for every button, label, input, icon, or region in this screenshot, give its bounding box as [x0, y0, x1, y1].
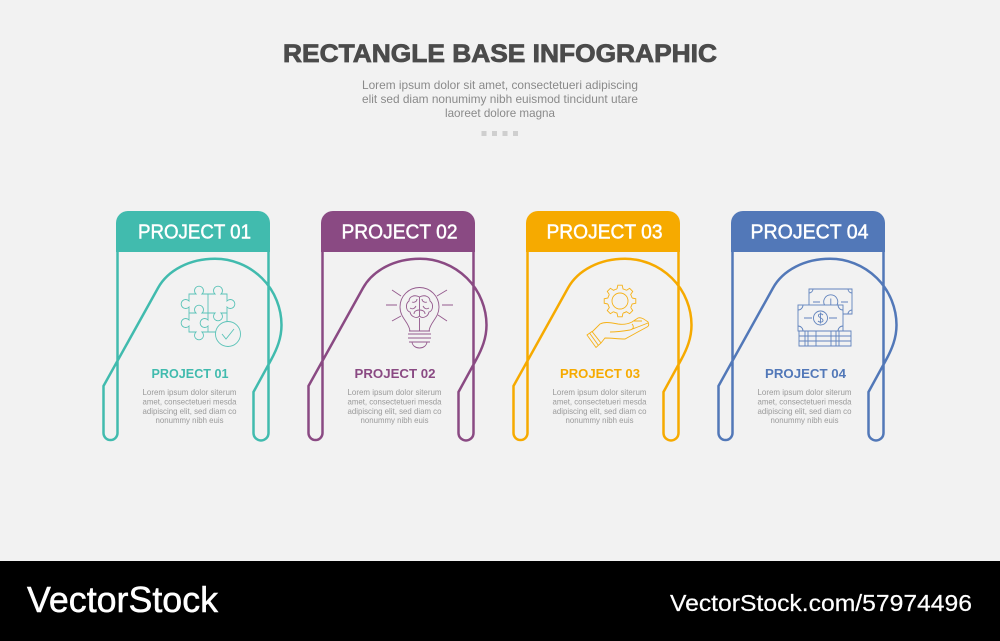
header: project 01: PROJECT 01 [138, 222, 251, 244]
dots divider [482, 131, 518, 136]
panel: project 02 [308, 211, 486, 441]
header: project 03 [526, 211, 680, 252]
header: project 02: PROJECT 02 [342, 222, 458, 244]
header: project 04: PROJECT 04 [750, 222, 868, 244]
body text: project 03: adipiscing elit, sed diam co [552, 406, 647, 416]
body text: project 03 [552, 387, 647, 425]
body text: project 02: adipiscing elit, sed diam co [348, 406, 442, 416]
label: project 02: PROJECT 02 [354, 366, 436, 381]
subtitle text block: laoreet dolore magna [445, 106, 555, 120]
header: project 03: PROJECT 03 [546, 222, 662, 244]
subtitle text block: Lorem ipsum dolor sit amet, consectetueri adipiscing [362, 78, 638, 92]
panel: project 03 [514, 211, 692, 441]
label: project 03: PROJECT 03 [560, 366, 640, 381]
icon: money [798, 289, 852, 346]
outline: project 04 [718, 252, 896, 441]
subtitle text block [362, 78, 638, 120]
header: project 02 [321, 211, 475, 252]
label: project 01: PROJECT 01 [152, 366, 228, 381]
panel: project 01 [104, 211, 282, 441]
body text: project 04: amet, consectetueri mesda [758, 396, 852, 406]
header: project 04 [731, 211, 885, 252]
body text: project 02 [348, 387, 442, 425]
outline: project 01 [104, 252, 282, 441]
body text: project 04 [758, 387, 852, 425]
body text: project 04: nonummy nibh euis [770, 415, 838, 425]
label: project 04: PROJECT 04 [765, 366, 847, 381]
body text: project 03: nonummy nibh euis [566, 415, 634, 425]
footer logo: VectorStock [27, 579, 219, 620]
body text: project 01: Lorem ipsum dolor siterum [142, 387, 236, 397]
body text: project 04: adipiscing elit, sed diam co [758, 406, 852, 416]
body text: project 02: amet, consectetueri mesda [348, 396, 442, 406]
outline: project 02 [308, 252, 486, 441]
body text: project 03: Lorem ipsum dolor siterum [552, 387, 646, 397]
icon: gear and hand [587, 285, 649, 348]
subtitle text block: elit sed diam nonumimy nibh euismod tincidunt utare [362, 92, 638, 106]
icon: puzzle [181, 286, 240, 346]
body text: project 01: nonummy nibh euis [156, 415, 224, 425]
body text: project 02: Lorem ipsum dolor siterum [348, 387, 442, 397]
footer band [0, 561, 1000, 641]
body text: project 03: amet, consectetueri mesda [552, 396, 647, 406]
header: project 01 [116, 211, 270, 252]
footer url: VectorStock.com/57974496 [670, 590, 972, 616]
panel: project 04 [718, 211, 896, 441]
body text: project 01 [142, 387, 237, 425]
body text: project 04: Lorem ipsum dolor siterum [758, 387, 852, 397]
body text: project 01: adipiscing elit, sed diam co [142, 406, 237, 416]
icon: light bulb with brain [386, 288, 453, 348]
body text: project 01: amet, consectetueri mesda [142, 396, 237, 406]
body text: project 02: nonummy nibh euis [360, 415, 428, 425]
outline: project 03 [514, 252, 692, 441]
title: RECTANGLE BASE INFOGRAPHIC [283, 40, 717, 68]
